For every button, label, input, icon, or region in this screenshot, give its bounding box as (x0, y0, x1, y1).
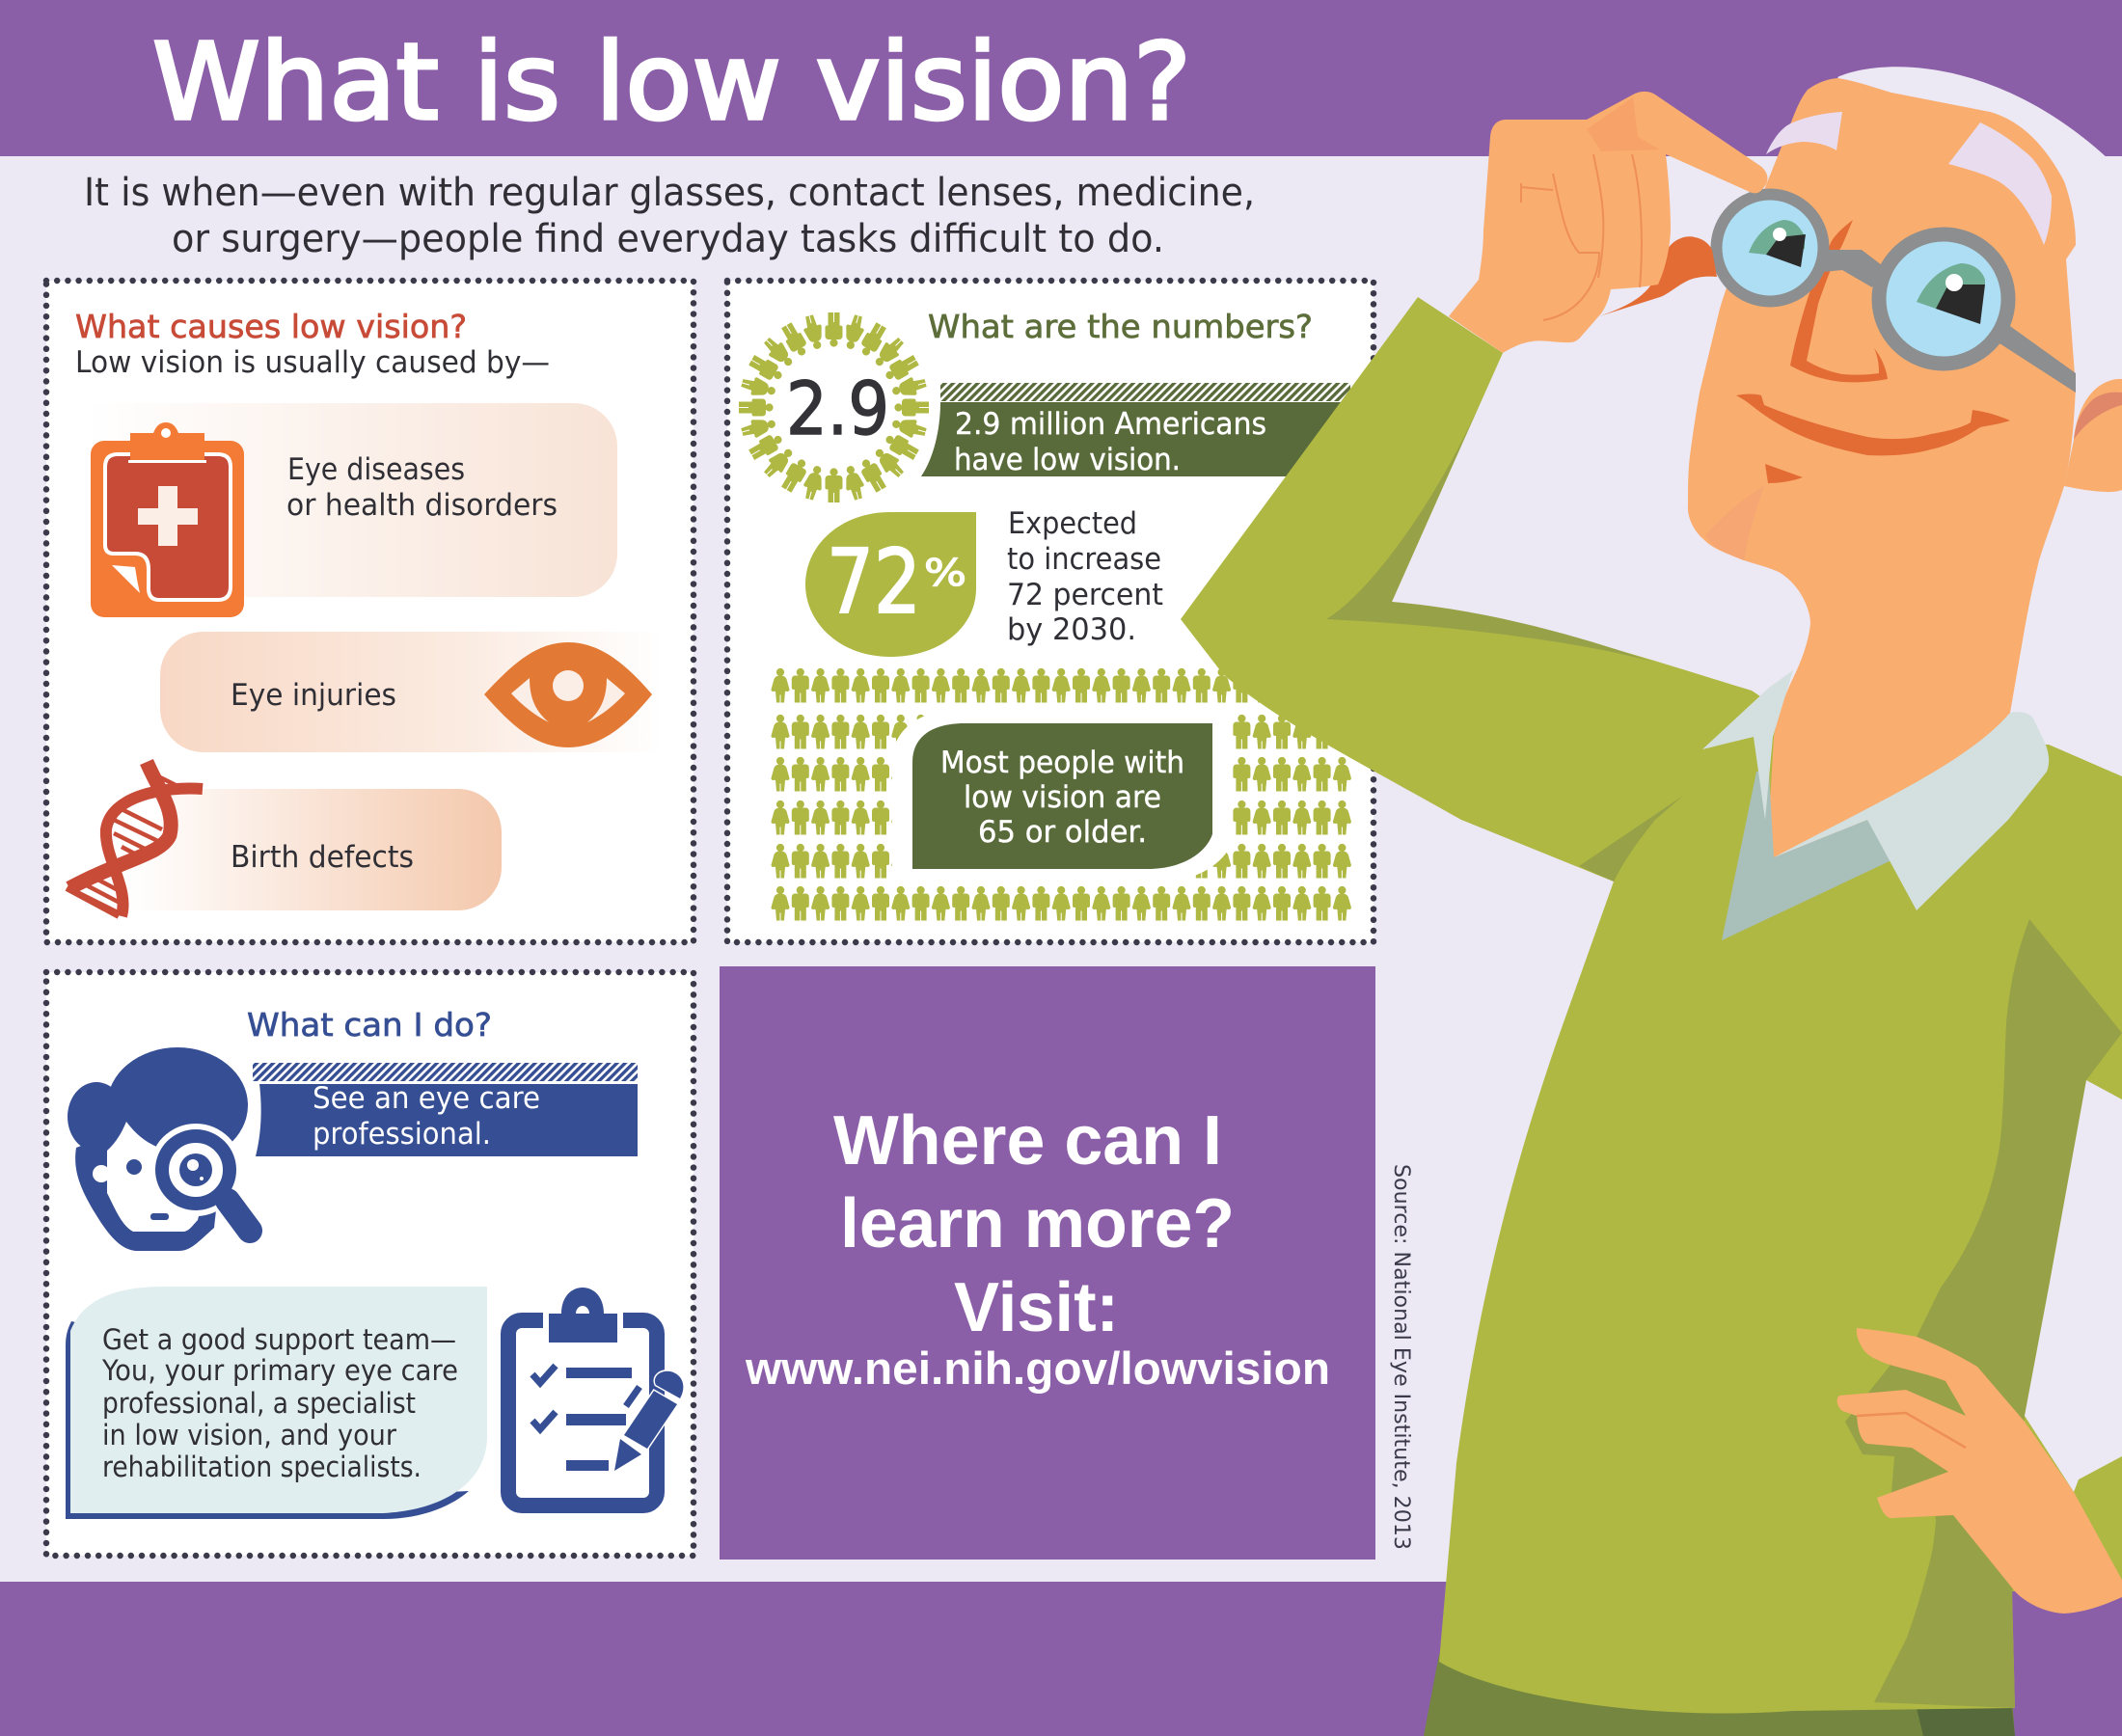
background gap at waist (2025, 1080, 2122, 1492)
banner text: professional. (313, 1117, 491, 1152)
armpit wedge shadow (1579, 796, 1683, 882)
72 percent badge: % (924, 552, 966, 594)
label: birth defects: Birth defects (231, 840, 414, 875)
panel: where can I learn more: www.nei.nih.gov/lowvision (745, 1343, 1330, 1394)
numbers heading: What are the numbers? (928, 308, 1313, 345)
figure: 2.9: 2.9 (786, 366, 889, 451)
icon: face with magnifier (68, 1047, 250, 1251)
banner text: have low vision. (954, 443, 1181, 477)
support team bubble: Get a good support team— (102, 1323, 456, 1356)
hair (1837, 67, 2122, 289)
blue banner (256, 1084, 638, 1156)
label: eye diseases (286, 452, 558, 523)
panel: where can I learn more: Visit: (954, 1269, 1119, 1346)
hand on hip (1837, 1328, 2122, 1614)
increase text: Expected (1008, 506, 1137, 541)
trousers (1424, 1654, 2015, 1736)
mouth (1736, 393, 2010, 455)
label: eye diseases: or health disorders (286, 488, 558, 523)
collar (1702, 670, 2049, 940)
72 percent badge: 72 (827, 530, 921, 634)
shadow between fingers (1845, 1364, 1977, 1505)
ring of people (739, 312, 928, 502)
panel: where can I learn more (720, 966, 1375, 1560)
panel: what can I do (46, 972, 694, 1556)
icon: eye (484, 642, 652, 747)
body side shadow (1874, 919, 2122, 1708)
people grid (772, 668, 1350, 920)
icon: DNA helix (67, 762, 203, 916)
intro text (84, 171, 1255, 261)
top purple banner (0, 0, 2122, 156)
support team bubble: in low vision, and your (102, 1419, 396, 1451)
increase text: 72 percent (1007, 578, 1163, 612)
sweater (1181, 297, 2122, 1714)
ear (2064, 379, 2122, 492)
increase text (1007, 506, 1163, 647)
callout: 65 or older: 65 or older. (978, 815, 1147, 850)
panel: causes (46, 281, 694, 942)
chin shading (1705, 486, 1764, 560)
hatched band (940, 383, 1350, 401)
white halo (892, 709, 1233, 884)
callout: 65 or older: low vision are (964, 780, 1161, 815)
causes heading: What causes low vision? (75, 308, 467, 345)
glasses (1717, 195, 2076, 393)
bubble: eye injuries (160, 632, 663, 752)
bubble: eye diseases (87, 403, 617, 597)
banner text: 2.9 million Americans (955, 407, 1266, 442)
increase text: by 2030. (1007, 612, 1136, 647)
causes intro: Low vision is usually caused by— (75, 345, 550, 380)
bottom purple banner (0, 1582, 2122, 1736)
nose (1790, 220, 1888, 382)
support team bubble: You, your primary eye care (101, 1354, 458, 1387)
banner text (313, 1081, 540, 1152)
man with glasses (1181, 67, 2122, 1736)
support team bubble: rehabilitation specialists. (102, 1451, 422, 1483)
intro text: It is when—even with regular glasses, contact lenses, medicine, (84, 171, 1255, 215)
neck and head (1688, 78, 2076, 857)
label: eye diseases: Eye diseases (287, 452, 465, 487)
label: eye injuries: Eye injuries (231, 678, 396, 713)
thumb (1599, 236, 1717, 316)
panel: where can I learn more: Where can I (833, 1102, 1222, 1180)
intro text: or surgery—people find everyday tasks difficult to do. (172, 217, 1164, 261)
source note: Source: National Eye Institute, 2013 (1389, 1164, 1413, 1550)
72 percent badge (805, 512, 976, 657)
raised hand (1449, 92, 1767, 353)
panel: where can I learn more: learn more? (840, 1185, 1235, 1262)
hatched band (253, 1063, 638, 1081)
icon: checklist clipboard (508, 1288, 683, 1505)
banner text: See an eye care (313, 1081, 540, 1116)
green banner (921, 402, 1399, 476)
support team bubble (66, 1287, 487, 1519)
do heading: What can I do? (247, 1006, 492, 1044)
support team bubble: professional, a specialist (102, 1387, 416, 1420)
bubble: birth defects (129, 789, 502, 910)
hair patches (1766, 112, 2052, 245)
icon: medical clipboard (91, 422, 244, 617)
callout: 65 or older (912, 723, 1212, 869)
increase text: to increase (1007, 542, 1161, 577)
title: What is low vision? (152, 20, 1191, 144)
sleeve crease shadow (1326, 395, 1655, 663)
callout: 65 or older: Most people with (940, 746, 1184, 780)
panel: numbers (727, 281, 1399, 942)
chin mark (1765, 464, 1803, 483)
banner text (954, 407, 1266, 477)
